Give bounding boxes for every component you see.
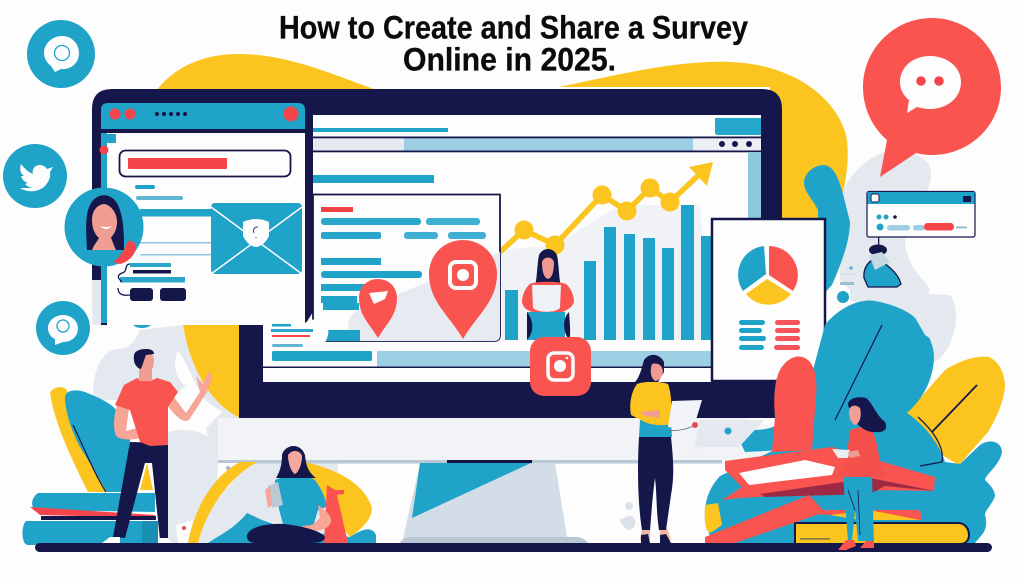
inner survey card [313, 194, 500, 341]
small form lines [118, 263, 186, 301]
hair [134, 349, 154, 369]
legend lines [739, 320, 800, 350]
yellow accents [188, 462, 257, 543]
left survey window [92, 103, 313, 328]
white speech cloud with small text lines [268, 319, 328, 350]
input field [120, 150, 290, 176]
window white body [107, 133, 305, 325]
icon: twitter bird [3, 144, 67, 208]
icon: instagram tile [530, 337, 591, 396]
lower left frame gap [92, 280, 101, 325]
neck and face [139, 366, 152, 381]
monitor chin [218, 418, 780, 464]
background blobs [93, 54, 956, 543]
hair and face [848, 397, 886, 432]
red open book [722, 447, 935, 500]
skin ankles and shoes [640, 528, 671, 540]
header underline [101, 129, 313, 133]
right strip [748, 152, 761, 227]
avatar: smiling woman [64, 188, 144, 266]
red bag [324, 485, 348, 543]
icon: chat bubble lower left [36, 301, 90, 355]
large speech bubble [863, 18, 1001, 177]
yellow between legs [140, 463, 153, 490]
arms [114, 405, 152, 440]
lower red book [705, 495, 825, 543]
leaf accents [736, 420, 790, 452]
paper [832, 449, 850, 458]
skin arm [302, 505, 331, 531]
lower screen bars [263, 351, 761, 368]
title [279, 10, 748, 78]
bars [505, 205, 712, 340]
red cactus [772, 356, 816, 452]
top right tab [715, 118, 761, 135]
red top [835, 427, 887, 477]
pants [638, 437, 673, 530]
monitor stand [400, 463, 588, 543]
window divider [305, 115, 313, 325]
books [32, 493, 155, 512]
teal pants [843, 475, 874, 541]
paper [268, 482, 283, 508]
right chart card [712, 219, 825, 381]
man in red shirt [102, 349, 212, 543]
white page [739, 460, 835, 485]
stacked books [705, 447, 969, 544]
woman standing with yellow top [630, 355, 702, 543]
paper [668, 400, 702, 430]
icon: chat bubble top left [27, 20, 95, 88]
small blue figure under panel [840, 237, 901, 287]
top teal line [313, 128, 448, 132]
small gray droplets [619, 502, 635, 530]
large map pin with camera icon [429, 240, 497, 339]
hair [276, 446, 316, 478]
small dashboard panel [867, 192, 975, 237]
sitting woman scene [176, 446, 376, 543]
chart area [500, 162, 713, 340]
hair and face [634, 355, 664, 383]
shirt [115, 378, 178, 446]
ground line [35, 543, 992, 552]
envelope icon [211, 203, 302, 274]
center woman with paper [522, 249, 574, 340]
trend line [500, 162, 713, 254]
yellow top [630, 382, 671, 425]
crossed legs [247, 524, 325, 543]
woman reading on books [832, 397, 887, 541]
yellow book [795, 523, 969, 544]
title: How to Create and Share a Survey [279, 10, 748, 46]
right foliage [694, 291, 1005, 543]
small map pin [359, 279, 397, 338]
browser bar [313, 136, 761, 152]
red shoes over ground [838, 540, 874, 550]
monitor screen [263, 115, 761, 382]
left foliage and books [22, 387, 158, 545]
teal shirt [275, 476, 326, 530]
pants [113, 442, 168, 540]
pie chart [738, 246, 798, 305]
monitor frame [92, 89, 782, 418]
title: Online in 2025. [403, 42, 616, 78]
window header [101, 103, 305, 129]
white paper bits [217, 463, 245, 488]
